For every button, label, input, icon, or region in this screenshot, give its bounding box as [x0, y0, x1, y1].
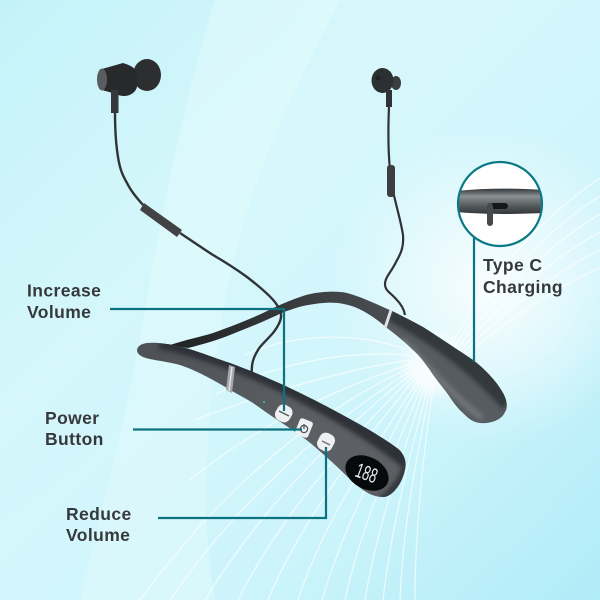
LED display: 188 [352, 458, 381, 488]
label: Power Button: Power [45, 408, 100, 428]
label: Increase Volume: Volume [27, 302, 91, 322]
label: Increase Volume [27, 280, 101, 322]
label: Increase Volume: Increase [27, 280, 101, 300]
label: Power Button: Button [45, 429, 104, 449]
neckband rear section [170, 292, 392, 348]
neckband front arm [137, 342, 406, 497]
label: Type C Charging: Charging [483, 277, 563, 297]
label: Reduce Volume: Reduce [66, 504, 132, 524]
label: Type C Charging: Type C [483, 255, 542, 275]
right cable with remote [385, 106, 405, 315]
callout lines [110, 238, 474, 518]
button: power [294, 417, 314, 439]
left cable with remote [115, 112, 281, 374]
label: Power Button [45, 408, 104, 449]
label: Type C Charging [483, 255, 563, 297]
label: Reduce Volume: Volume [66, 525, 130, 545]
label: Reduce Volume [66, 504, 132, 545]
left earbud [97, 59, 161, 113]
button: reduce volume [315, 430, 337, 454]
neckband right arm [384, 310, 507, 424]
right earbud [372, 68, 401, 107]
inset: type C port [456, 162, 544, 246]
LED display [339, 448, 395, 498]
button: increase volume [273, 402, 295, 425]
